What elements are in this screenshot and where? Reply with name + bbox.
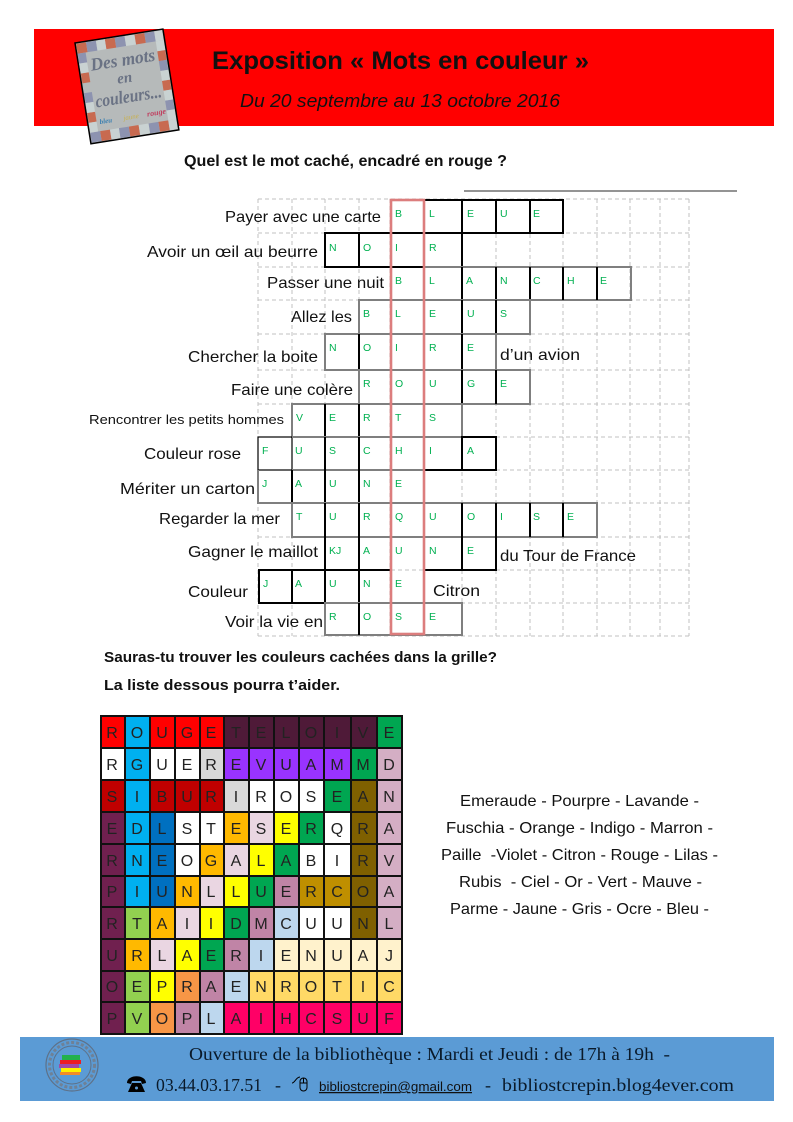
grid row 8: R <box>131 948 143 965</box>
row: verts: S <box>429 412 436 424</box>
icon: telephone <box>127 1076 146 1092</box>
grid row 10: I <box>259 1011 263 1028</box>
grid row 7: R <box>106 916 118 933</box>
poster image: rouge <box>146 107 167 119</box>
grid row 1: V <box>358 725 369 742</box>
grid row 5: L <box>257 853 266 870</box>
grid row 3: S <box>306 789 316 806</box>
grid row 4 <box>102 813 401 843</box>
grid row 5: B <box>306 853 316 870</box>
grid row 7: D <box>230 916 242 933</box>
grid row 5: E <box>157 853 167 870</box>
grid row 4: E <box>281 821 291 838</box>
row: blanche: N <box>500 275 508 287</box>
grid row 3: O <box>280 789 292 806</box>
row: turquoise: I <box>500 511 503 523</box>
grid row 10: F <box>384 1011 394 1028</box>
row: blanche: A <box>466 275 473 287</box>
grid row 4: S <box>182 821 192 838</box>
grid row 2: D <box>383 757 395 774</box>
grid row 7: U <box>331 916 343 933</box>
grid row 10: O <box>156 1011 168 1028</box>
row: turquoise: U <box>329 511 337 523</box>
grid row 3: E <box>332 789 342 806</box>
row: bleue: U <box>500 208 508 220</box>
row: turquoise: S <box>533 511 540 523</box>
grid row 7: A <box>157 916 168 933</box>
grid row 5: I <box>335 853 339 870</box>
colour word list: Parme - Jaune - Gris - Ocre - Bleu - <box>450 901 709 918</box>
grid row 6: E <box>281 884 291 901</box>
row: noire: I <box>395 342 398 354</box>
grid row 10 <box>102 1003 401 1033</box>
phone number: 03.44.03.17.51 <box>156 1075 262 1095</box>
grid row 6: P <box>107 884 117 901</box>
grid row 8 <box>102 940 401 970</box>
row: bleus: Allez les <box>291 309 352 326</box>
grid row 6: N <box>181 884 193 901</box>
grid row 2 <box>102 749 401 779</box>
row: bleus: U <box>467 308 475 320</box>
colour word list: Paille -Violet - Citron - Rouge - Lilas - <box>441 847 718 864</box>
colour word list: Fuschia - Orange - Indigo - Marron - <box>446 820 713 837</box>
row: rose: O <box>363 611 371 623</box>
poster image: en <box>116 70 133 88</box>
row: blanche: B <box>395 275 402 287</box>
row: bleue: B <box>395 208 402 220</box>
grid instructions: La liste dessous pourra t’aider. <box>104 677 340 694</box>
grid row 2: U <box>156 757 168 774</box>
grid row 9: I <box>361 979 365 996</box>
grid row 4: Q <box>331 821 343 838</box>
grid row 5 <box>102 845 401 875</box>
subtitle dates: Du 20 septembre au 13 octobre 2016 <box>240 91 561 111</box>
grid row 1: O <box>131 725 143 742</box>
row: rose: Voir la vie en <box>225 614 323 631</box>
row: jaune: E <box>395 478 402 490</box>
row: fuschia: H <box>395 445 403 457</box>
row: jaune: U <box>329 478 337 490</box>
grid row 1: R <box>106 725 118 742</box>
colour word list: Emeraude - Pourpre - Lavande - <box>460 793 699 810</box>
grid row 4: E <box>231 821 241 838</box>
answer line <box>464 190 737 192</box>
row: jaune citron: N <box>363 578 371 590</box>
grid row 9: R <box>280 979 292 996</box>
grid instructions: Sauras-tu trouver les couleurs cachées dans la grille? <box>104 649 497 666</box>
row: jaune citron <box>188 570 480 603</box>
grid row 7: I <box>185 916 189 933</box>
grid row 8: L <box>158 948 167 965</box>
grid row 5: A <box>231 853 242 870</box>
grid row 3: B <box>157 789 167 806</box>
title: Exposition « Mots en couleur » <box>212 47 589 75</box>
colour word list <box>441 793 718 918</box>
grid row 4: T <box>206 821 216 838</box>
row: jaune maillot: E <box>467 545 474 557</box>
grid row 7: M <box>254 916 268 933</box>
grid row 1: L <box>282 725 291 742</box>
grid row 3: U <box>181 789 193 806</box>
row: noire: d’un avion <box>500 347 580 364</box>
row: noire: E <box>467 342 474 354</box>
row: jaune maillot: N <box>429 545 437 557</box>
row: rouge: R <box>363 378 371 390</box>
row: noir: R <box>429 242 437 254</box>
grid row 4: S <box>256 821 266 838</box>
grid row 1: I <box>335 725 339 742</box>
grid row 10: P <box>182 1011 192 1028</box>
row: fuschia: S <box>329 445 336 457</box>
row: fuschia: Couleur rose <box>144 446 241 463</box>
grid row 6: I <box>135 884 139 901</box>
grid row 5: V <box>384 853 395 870</box>
grid row 8: U <box>106 948 118 965</box>
row: jaune: J <box>262 478 267 490</box>
grid row 9: R <box>181 979 193 996</box>
footer band <box>20 1037 774 1101</box>
grid row 1: U <box>156 725 168 742</box>
row: bleue: L <box>429 208 435 220</box>
poster image: bleu <box>99 116 113 126</box>
colour word list: Rubis - Ciel - Or - Vert - Mauve - <box>459 874 702 891</box>
grid row 2: R <box>205 757 217 774</box>
poster image: couleurs... <box>94 81 163 111</box>
grid row 3: R <box>205 789 217 806</box>
grid row 2: E <box>182 757 192 774</box>
row: fuschia: U <box>295 445 303 457</box>
row: blanche: C <box>533 275 541 287</box>
grid row 6: U <box>156 884 168 901</box>
grid row 10: L <box>207 1011 216 1028</box>
crossword puzzle <box>89 199 689 636</box>
question heading: Quel est le mot caché, encadré en rouge ? <box>184 153 507 170</box>
grid row 9: T <box>332 979 342 996</box>
grid row 10: C <box>305 1011 317 1028</box>
row: bleus: S <box>500 308 507 320</box>
grid row 6: L <box>232 884 241 901</box>
grid row 10: S <box>332 1011 342 1028</box>
row: turquoise: Regarder la mer <box>159 511 281 528</box>
grid row 1: O <box>305 725 317 742</box>
row: bleue: Payer avec une carte <box>225 209 381 226</box>
row: fuschia: F <box>262 445 268 457</box>
row: jaune maillot: KJ <box>329 545 341 557</box>
grid row 8: N <box>305 948 317 965</box>
row: jaune citron: J <box>263 578 268 590</box>
grid row 7: L <box>385 916 394 933</box>
grid row 9: O <box>305 979 317 996</box>
grid row 4: R <box>305 821 317 838</box>
row: verts: V <box>296 412 303 424</box>
grid row 2: V <box>256 757 267 774</box>
row: blanche: Passer une nuit <box>267 275 385 292</box>
row: rose: R <box>329 611 337 623</box>
opening hours: Ouverture de la bibliothèque : Mardi et Jeudi : de 17h à 19h - <box>189 1044 670 1064</box>
row: turquoise: E <box>567 511 574 523</box>
row: jaune: N <box>363 478 371 490</box>
row: verts: R <box>363 412 371 424</box>
grid row 10: A <box>231 1011 242 1028</box>
grid row 8: R <box>230 948 242 965</box>
grid row 10: P <box>107 1011 117 1028</box>
grid row 10: V <box>132 1011 143 1028</box>
row: turquoise: Q <box>395 511 403 523</box>
grid row 3: R <box>255 789 267 806</box>
row: noir: I <box>395 242 398 254</box>
row: bleus: L <box>395 308 401 320</box>
grid row 1: E <box>256 725 266 742</box>
grid row 3 <box>102 781 401 811</box>
grid row 7: C <box>280 916 292 933</box>
grid row 3: N <box>383 789 395 806</box>
row: bleus: B <box>363 308 370 320</box>
grid row 8: A <box>182 948 193 965</box>
grid row 1: E <box>206 725 216 742</box>
poster image: Des mots <box>88 45 156 75</box>
grid row 2: A <box>306 757 317 774</box>
row: rose: E <box>429 611 436 623</box>
row: jaune citron: Couleur <box>188 584 249 601</box>
grid row 8: E <box>281 948 291 965</box>
row: turquoise <box>159 503 597 537</box>
red hidden word frame <box>391 200 424 634</box>
website: bibliostcrepin.blog4ever.com <box>502 1075 734 1095</box>
row: noire: Chercher la boite <box>188 349 318 366</box>
grid row 9: P <box>157 979 167 996</box>
grid row 9: N <box>255 979 267 996</box>
row: noire: O <box>363 342 371 354</box>
grid row 2: R <box>106 757 118 774</box>
row: jaune citron: A <box>295 578 302 590</box>
grid row 4: L <box>158 821 167 838</box>
poster image <box>75 29 179 144</box>
row: noire: R <box>429 342 437 354</box>
row: blanche <box>267 267 631 300</box>
grid row 2: U <box>280 757 292 774</box>
row: verts: E <box>329 412 336 424</box>
grid row 5: R <box>357 853 369 870</box>
grid row 9: E <box>132 979 142 996</box>
row: bleue: E <box>533 208 540 220</box>
grid row 6 <box>102 877 401 906</box>
icon: library logo <box>46 1039 98 1091</box>
row: verts: T <box>395 412 402 424</box>
grid row 7: U <box>305 916 317 933</box>
grid row 3: I <box>234 789 238 806</box>
grid row 5: G <box>205 853 217 870</box>
grid row 9: O <box>106 979 118 996</box>
grid row 10: H <box>280 1011 292 1028</box>
grid row 5: A <box>281 853 292 870</box>
grid row 1: E <box>384 725 394 742</box>
row: turquoise: O <box>467 511 475 523</box>
icon: mouse <box>292 1077 307 1091</box>
grid row 5: N <box>131 853 143 870</box>
row: rose <box>225 603 462 635</box>
header band <box>34 29 774 126</box>
row: fuschia: A <box>467 445 474 457</box>
row: noire: N <box>329 342 337 354</box>
row: jaune citron: U <box>329 578 337 590</box>
row: rose: S <box>395 611 402 623</box>
grid row 4: E <box>107 821 117 838</box>
grid row 6: O <box>357 884 369 901</box>
grid row 7: T <box>132 916 142 933</box>
row: jaune maillot: du Tour de France <box>500 548 636 565</box>
grid row 2: M <box>330 757 344 774</box>
row: rouge: O <box>395 378 403 390</box>
row: fuschia: I <box>429 445 432 457</box>
grid row 6: L <box>207 884 216 901</box>
row: fuschia: C <box>363 445 371 457</box>
grid instructions <box>104 649 497 694</box>
grid row 8: J <box>385 948 393 965</box>
row: verts <box>89 404 462 437</box>
row: noire <box>188 334 580 370</box>
grid row 8: A <box>358 948 369 965</box>
row: rouge <box>231 370 530 404</box>
row: turquoise: T <box>296 511 303 523</box>
row: jaune maillot: U <box>395 545 403 557</box>
grid row 8: U <box>331 948 343 965</box>
row: jaune maillot: Gagner le maillot <box>188 544 319 561</box>
grid row 5: R <box>106 853 118 870</box>
grid row 6: C <box>331 884 343 901</box>
row: jaune: Mériter un carton <box>120 481 255 498</box>
email: bibliostcrepin@gmail.com <box>319 1080 472 1094</box>
row: rouge: Faire une colère <box>231 382 353 399</box>
row: fuschia <box>144 437 496 470</box>
row: jaune maillot <box>188 537 636 570</box>
grid row 9 <box>102 972 401 1001</box>
row: noir: N <box>329 242 337 254</box>
row: jaune: A <box>295 478 302 490</box>
row: bleue: E <box>467 208 474 220</box>
row: bleus: E <box>429 308 436 320</box>
row: turquoise: R <box>363 511 371 523</box>
grid row 1 <box>102 717 401 747</box>
grid row 7 <box>102 908 401 938</box>
grid row 2: M <box>356 757 370 774</box>
poster image: jaune <box>122 112 139 122</box>
grid row 1: T <box>231 725 241 742</box>
grid row 8: I <box>259 948 263 965</box>
row: noir: Avoir un œil au beurre <box>147 244 318 261</box>
grid row 3: I <box>135 789 139 806</box>
grid row 5: O <box>181 853 193 870</box>
grid row 10: U <box>357 1011 369 1028</box>
row: jaune <box>120 470 402 503</box>
grid row 4: A <box>384 821 395 838</box>
row: blanche: E <box>600 275 607 287</box>
row: rouge: U <box>429 378 437 390</box>
grid row 4: R <box>357 821 369 838</box>
row: rouge: E <box>500 378 507 390</box>
row: turquoise: U <box>429 511 437 523</box>
grid row 4: D <box>131 821 143 838</box>
grid row 9: A <box>206 979 217 996</box>
row: jaune citron: Citron <box>433 583 480 600</box>
grid row 3: S <box>107 789 117 806</box>
row: rouge: G <box>467 378 475 390</box>
grid row 1: G <box>181 725 193 742</box>
row: jaune maillot: A <box>363 545 370 557</box>
grid row 7: N <box>357 916 369 933</box>
grid row 6: A <box>384 884 395 901</box>
grid row 6: U <box>255 884 267 901</box>
row: verts: Rencontrer les petits hommes <box>89 412 285 427</box>
row: noir <box>147 233 462 267</box>
row: noir: O <box>363 242 371 254</box>
grid row 9: C <box>383 979 395 996</box>
grid row 3: A <box>358 789 369 806</box>
word search grid <box>100 715 403 1035</box>
row: jaune citron: E <box>395 578 402 590</box>
grid row 2: G <box>131 757 143 774</box>
grid row 2: E <box>231 757 241 774</box>
grid row 8: E <box>206 948 216 965</box>
grid row 6: R <box>305 884 317 901</box>
row: bleue <box>225 200 563 233</box>
grid row 9: E <box>231 979 241 996</box>
row: blanche: H <box>567 275 575 287</box>
row: bleus <box>291 300 530 334</box>
grid row 7: I <box>209 916 213 933</box>
separator: - <box>485 1075 491 1095</box>
row: blanche: L <box>429 275 435 287</box>
separator: - <box>275 1075 281 1095</box>
